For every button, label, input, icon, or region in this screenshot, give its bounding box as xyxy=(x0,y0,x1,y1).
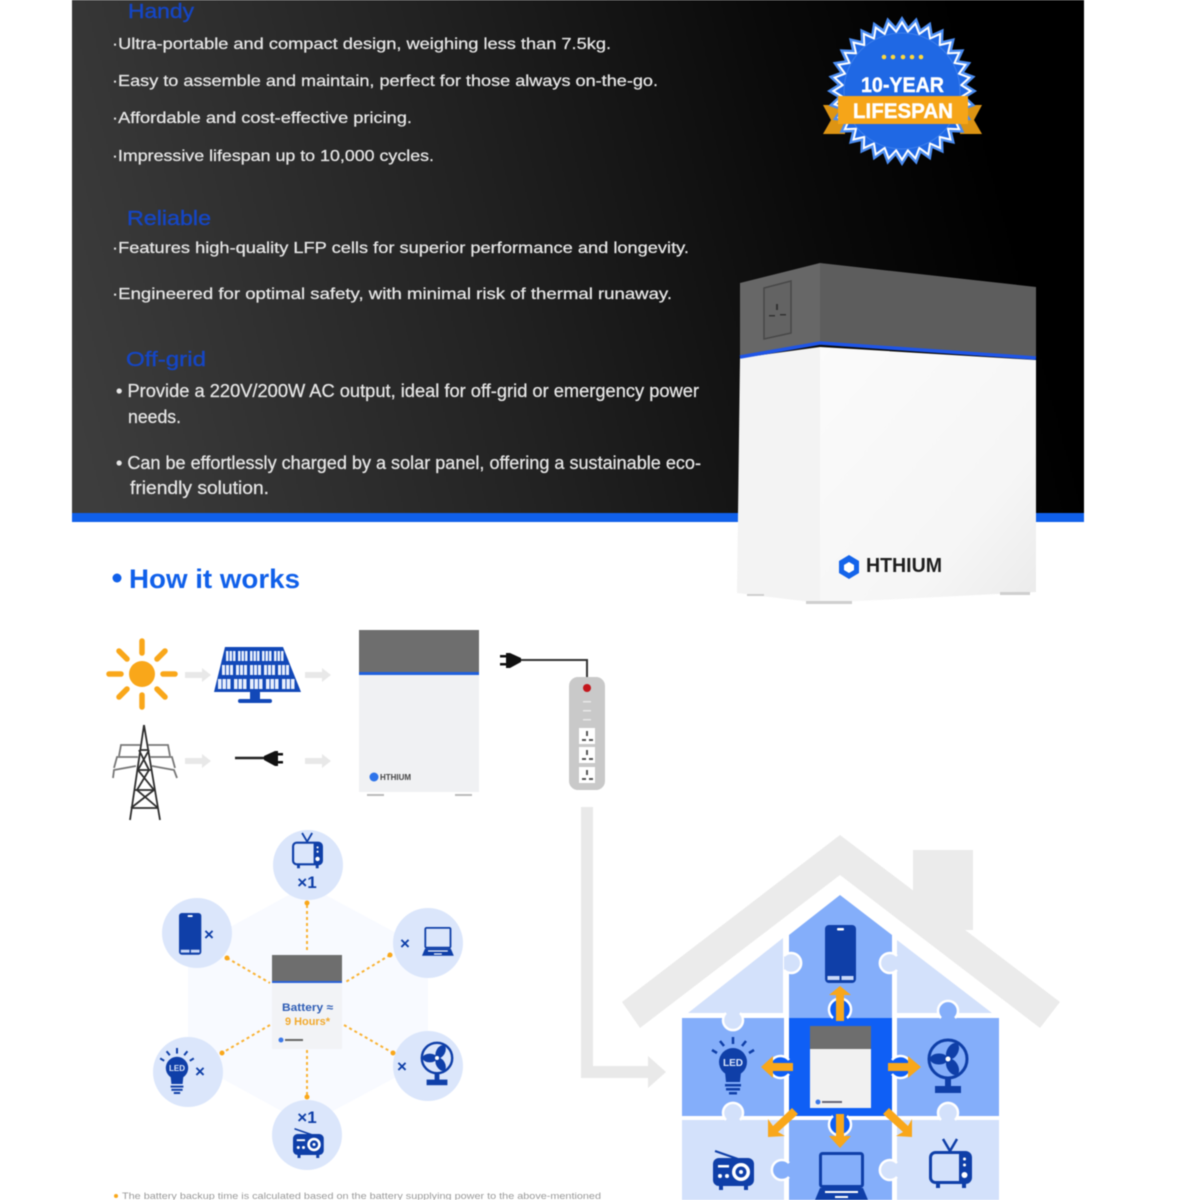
puzzle: centre knobs xyxy=(770,999,911,1135)
heading: How it works: How it works xyxy=(129,564,300,594)
text: Off-grid bullets: needs. xyxy=(128,407,181,427)
house icon: radio xyxy=(713,1151,754,1190)
icon: solar panel xyxy=(214,647,301,703)
node: laptop xyxy=(393,908,463,978)
gray arrows: sources to battery xyxy=(185,668,331,768)
node: LED bulb xyxy=(153,1037,223,1107)
illustration: house xyxy=(622,835,1060,1200)
node: fan xyxy=(393,1031,463,1101)
text: Handy bullets: ·Impressive lifespan up to 10,000 cycles. xyxy=(112,148,434,165)
house icon: TV xyxy=(930,1139,970,1188)
node: radio: ×1 xyxy=(297,1108,317,1127)
panel: dark features background xyxy=(72,0,1084,513)
heading: Off-grid: Off-grid xyxy=(126,349,206,371)
section: Handy xyxy=(112,1,658,165)
node: phone xyxy=(162,898,232,968)
socket panel xyxy=(764,281,791,339)
cable and output plug xyxy=(500,653,587,678)
node: TV: ×1 xyxy=(297,873,317,892)
arrow: strip to house xyxy=(581,807,666,1088)
house icon: phone xyxy=(825,925,856,983)
heading: Reliable: Reliable xyxy=(127,208,211,230)
icon: sun xyxy=(109,641,175,707)
heading: Handy: Handy xyxy=(128,1,194,23)
illustration: 3D battery product xyxy=(737,263,1036,604)
feet xyxy=(747,592,1030,604)
text: Reliable bullets xyxy=(112,240,689,303)
dashed connectors xyxy=(222,905,393,1097)
grey lid xyxy=(740,263,820,358)
hub background hexagon xyxy=(188,885,428,1125)
puzzle: medium pieces xyxy=(682,895,999,1200)
badge: 10-year lifespan: LIFESPAN xyxy=(853,100,953,123)
hub battery xyxy=(272,955,342,1049)
hub battery: Battery ≈ xyxy=(282,1002,333,1014)
section: Reliable xyxy=(112,208,689,303)
icon: plug xyxy=(235,751,283,766)
node: radio xyxy=(272,1100,342,1170)
node: laptop: × xyxy=(400,934,410,953)
icon: pylon xyxy=(113,725,177,820)
hub battery: 9 Hours* xyxy=(285,1016,331,1028)
text: Reliable bullets: ·Engineered for optimal safety, with minimal risk of thermal runaway. xyxy=(112,286,672,303)
text: Off-grid bullets xyxy=(116,381,701,498)
text: Handy bullets: ·Affordable and cost-effective pricing. xyxy=(112,110,412,127)
orange arrows xyxy=(761,986,921,1148)
text: Handy bullets: ·Ultra-portable and compact design, weighing less than 7.5kg. xyxy=(112,36,611,53)
diagram: appliance hub xyxy=(153,830,463,1170)
text: Off-grid bullets: • Provide a 220V/200W AC output, ideal for off-grid or emergency power xyxy=(116,381,699,401)
text: Off-grid bullets: • Can be effortlessly charged by a solar panel, offering a sustainable eco- xyxy=(116,453,701,473)
power strip xyxy=(569,677,605,790)
puzzle: knobs xyxy=(723,953,958,1180)
roof xyxy=(622,835,1060,1028)
puzzle: light pieces xyxy=(682,938,999,1200)
text: Handy bullets: ·Easy to assemble and maintain, perfect for those always on-the-go. xyxy=(112,73,658,90)
text: Handy bullets xyxy=(112,36,658,165)
house battery xyxy=(810,1026,871,1108)
illustration: front battery xyxy=(359,630,479,796)
HTHIUM logo: HTHIUM xyxy=(866,555,942,577)
puzzle: centre piece xyxy=(789,1018,892,1116)
node: TV xyxy=(273,830,343,900)
blue light seam xyxy=(740,343,1036,358)
badge text: 10-YEAR xyxy=(861,74,944,97)
chimney xyxy=(913,850,973,930)
illustration: front battery: HTHIUM xyxy=(380,773,411,782)
house icon: laptop xyxy=(815,1154,868,1200)
white body xyxy=(737,347,820,603)
rating stars xyxy=(882,55,923,59)
text: Reliable bullets: ·Features high-quality LFP cells for superior performance and longevity. xyxy=(112,240,689,257)
badge: 10-year lifespan xyxy=(823,16,982,166)
HTHIUM logo xyxy=(839,555,942,579)
ribbon band xyxy=(838,96,968,124)
blue divider strip xyxy=(72,513,1084,522)
node: phone: × xyxy=(204,925,214,944)
house icon: LED bulb xyxy=(712,1037,754,1094)
section: Off-grid xyxy=(116,349,701,498)
node: LED bulb: × xyxy=(195,1062,205,1081)
node: fan: × xyxy=(397,1057,407,1076)
ribbon tails xyxy=(823,105,982,134)
house icon: fan xyxy=(929,1040,967,1093)
text: Off-grid bullets: friendly solution. xyxy=(130,478,269,498)
